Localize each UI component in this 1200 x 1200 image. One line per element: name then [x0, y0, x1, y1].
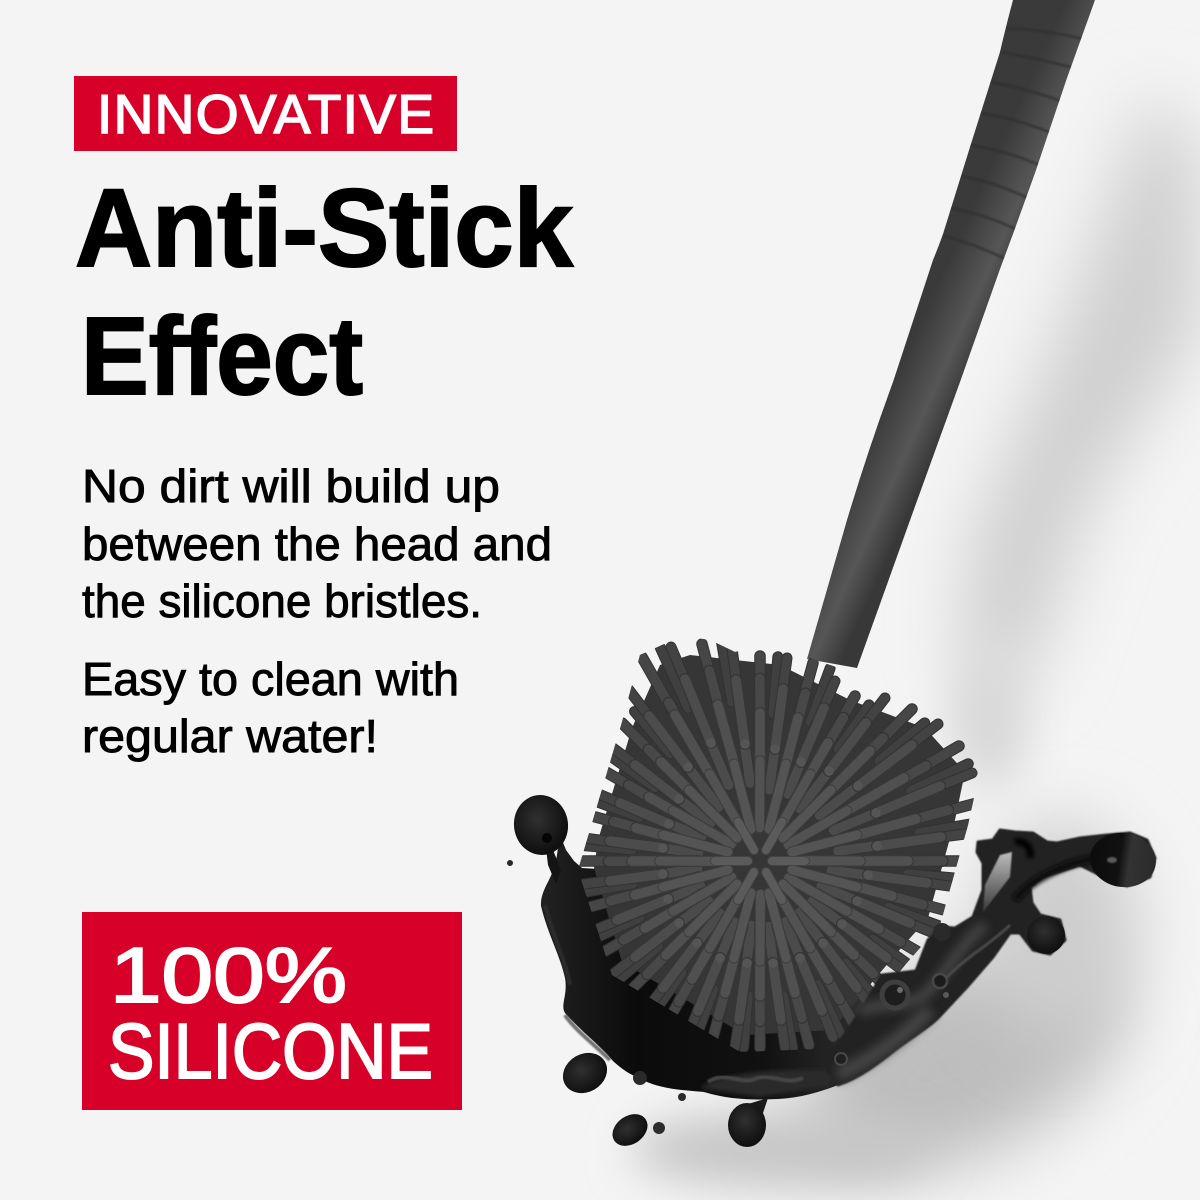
badge: innovative: INNOVATIVE	[97, 83, 434, 145]
title: Effect	[81, 295, 363, 418]
body text: Easy to clean with	[82, 653, 459, 705]
brush handle	[807, 0, 1095, 668]
badge: 100% silicone: 100%	[110, 931, 347, 1019]
title	[75, 167, 574, 418]
body text	[82, 460, 552, 762]
body text: No dirt will build up	[82, 460, 500, 512]
title: Anti-Stick	[75, 167, 574, 290]
droplets	[507, 792, 768, 1152]
cast shadow	[630, 90, 1200, 1200]
body text: the silicone bristles.	[82, 575, 482, 627]
splash front arc	[822, 829, 1159, 1085]
brush head with silicone bristles	[579, 638, 978, 1052]
body text: regular water!	[82, 710, 378, 762]
body text: between the head and	[82, 518, 552, 570]
badge: 100% silicone: SILICONE	[108, 1007, 433, 1095]
badge: 100% silicone	[82, 912, 462, 1110]
splash back	[541, 835, 880, 1099]
